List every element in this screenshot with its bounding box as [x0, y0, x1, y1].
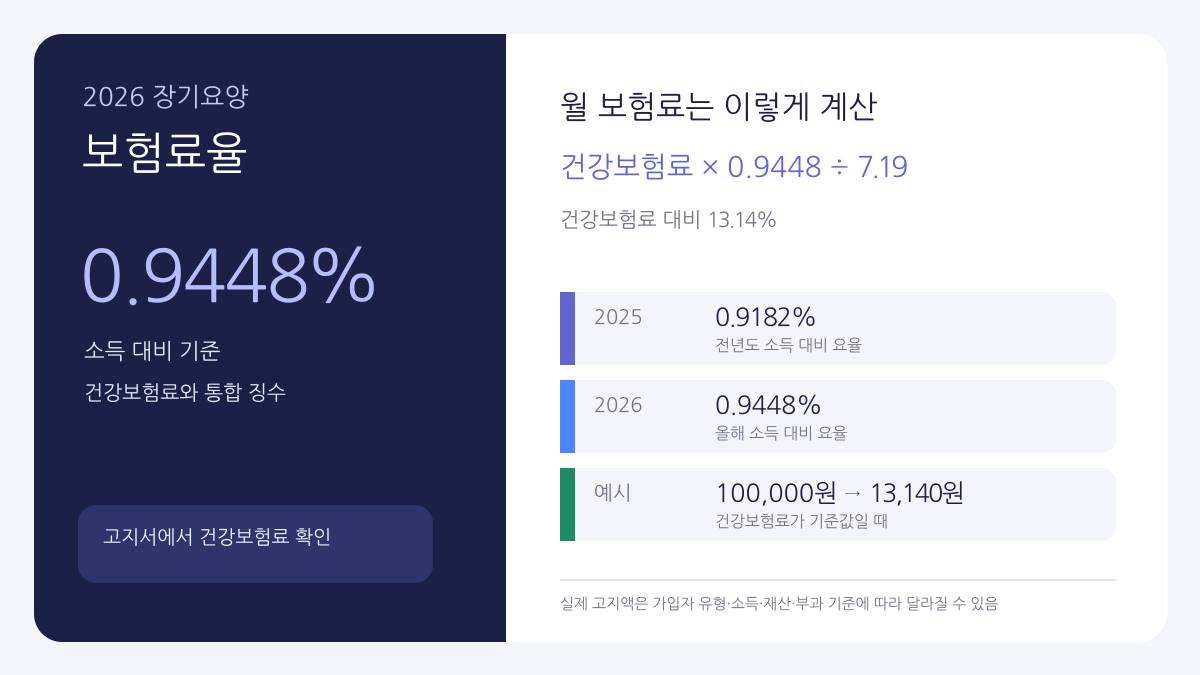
big rate: 0.9448%: [80, 241, 381, 313]
value: 0.9448%: [715, 393, 823, 418]
footnote: 실제 고지액은 가입자 유형·소득·재산·부과 기준에 따라 달라질 수 있음: [560, 597, 998, 612]
caption: 전년도 소득 대비 요율: [715, 338, 862, 354]
accent bar: [560, 292, 575, 365]
row: 2025: [560, 292, 1116, 365]
callout text: 고지서에서 건강보험료 확인: [103, 527, 331, 547]
value: 100,000원 → 13,140원: [715, 481, 963, 506]
basis line: 소득 대비 기준: [84, 341, 220, 363]
label: 2026: [594, 395, 642, 415]
eyebrow: 2026 장기요양: [82, 84, 249, 110]
row: example: [560, 468, 1116, 541]
panel: formula heading: 월 보험료는 이렇게 계산: [560, 92, 877, 123]
accent bar: [560, 468, 575, 541]
formula note: 건강보험료 대비 13.14%: [560, 209, 777, 230]
callout: [78, 505, 433, 583]
label: 2025: [594, 307, 642, 327]
caption: 건강보험료가 기준값일 때: [715, 514, 888, 530]
panel: left summary: [34, 34, 506, 642]
label: 예시: [594, 483, 632, 503]
row: 2026: [560, 380, 1116, 453]
caption: 올해 소득 대비 요율: [715, 426, 847, 442]
heading: 보험료율: [82, 132, 247, 176]
value: 0.9182%: [715, 305, 816, 330]
integrated note: 건강보험료와 통합 징수: [84, 383, 286, 403]
formula: 건강보험료 × 0.9448 ÷ 7.19: [560, 154, 905, 182]
accent bar: [560, 380, 575, 453]
